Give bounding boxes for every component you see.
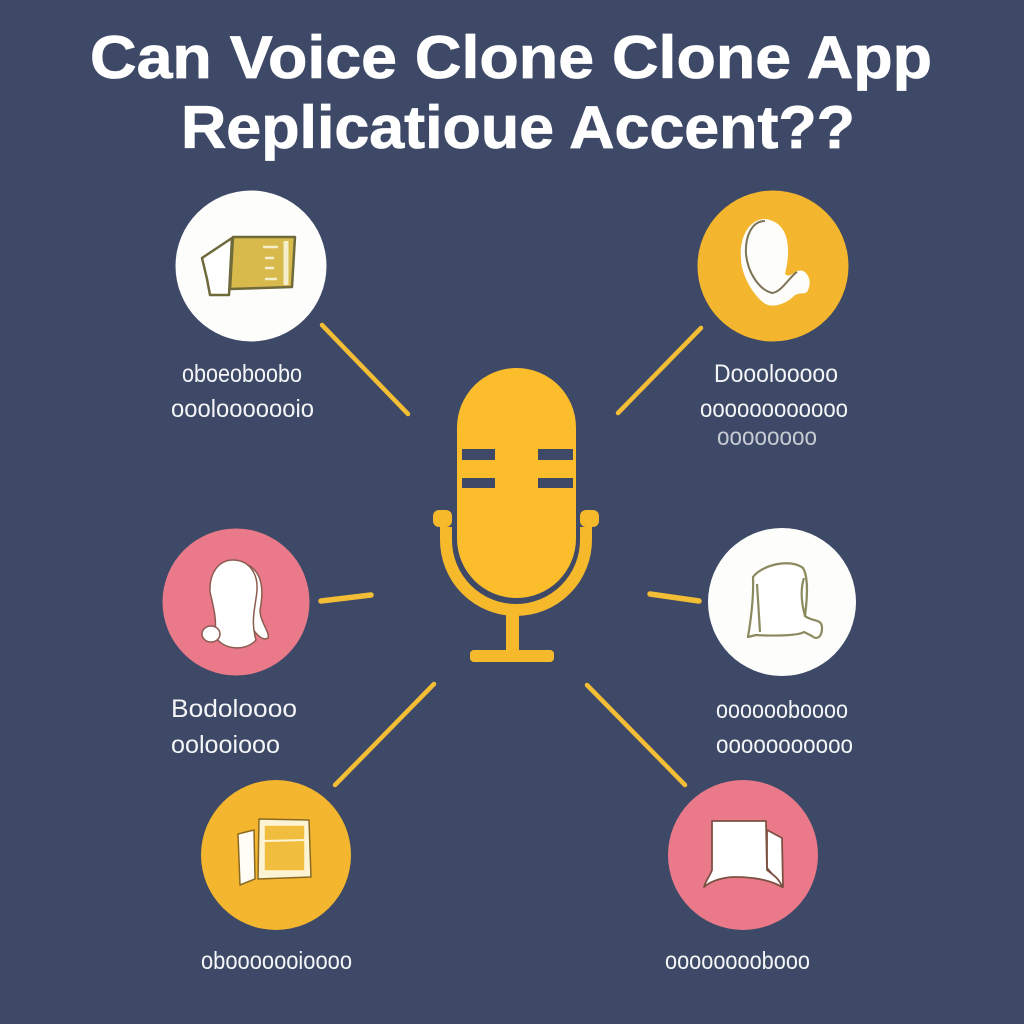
panel: middle right node: ooooooooooo [716,731,853,759]
title [90,24,932,161]
panel: bottom left node [201,780,352,975]
panel: top left node: oboeoboobo [182,360,302,388]
panel: bottom right node: oooooooobooo [665,947,810,975]
panel: top right node: oooooooo [717,423,817,451]
panel: top right node: oooooooooooo [700,395,848,423]
panel: top left node: ooolooooooio [171,395,314,423]
panel: top right node [698,190,848,451]
panel: bottom right node [665,780,818,975]
panel: middle left node: Bodoloooo [171,695,297,723]
panel: middle left node: oolooiooo [171,731,280,759]
panel: top right node: Dooolooooo [714,360,838,388]
title: Replicatioue Accent?? [181,94,855,161]
panel: middle left node [162,528,310,759]
panel: middle right node [708,528,856,759]
panel: top left node [171,190,326,423]
panel: middle right node: ooooooboooo [716,696,848,724]
connector lines [321,325,701,785]
central microphone icon [433,368,599,662]
title: Can Voice Clone Clone App [90,24,932,91]
panel: bottom left node: obooooooioooo [201,947,352,975]
